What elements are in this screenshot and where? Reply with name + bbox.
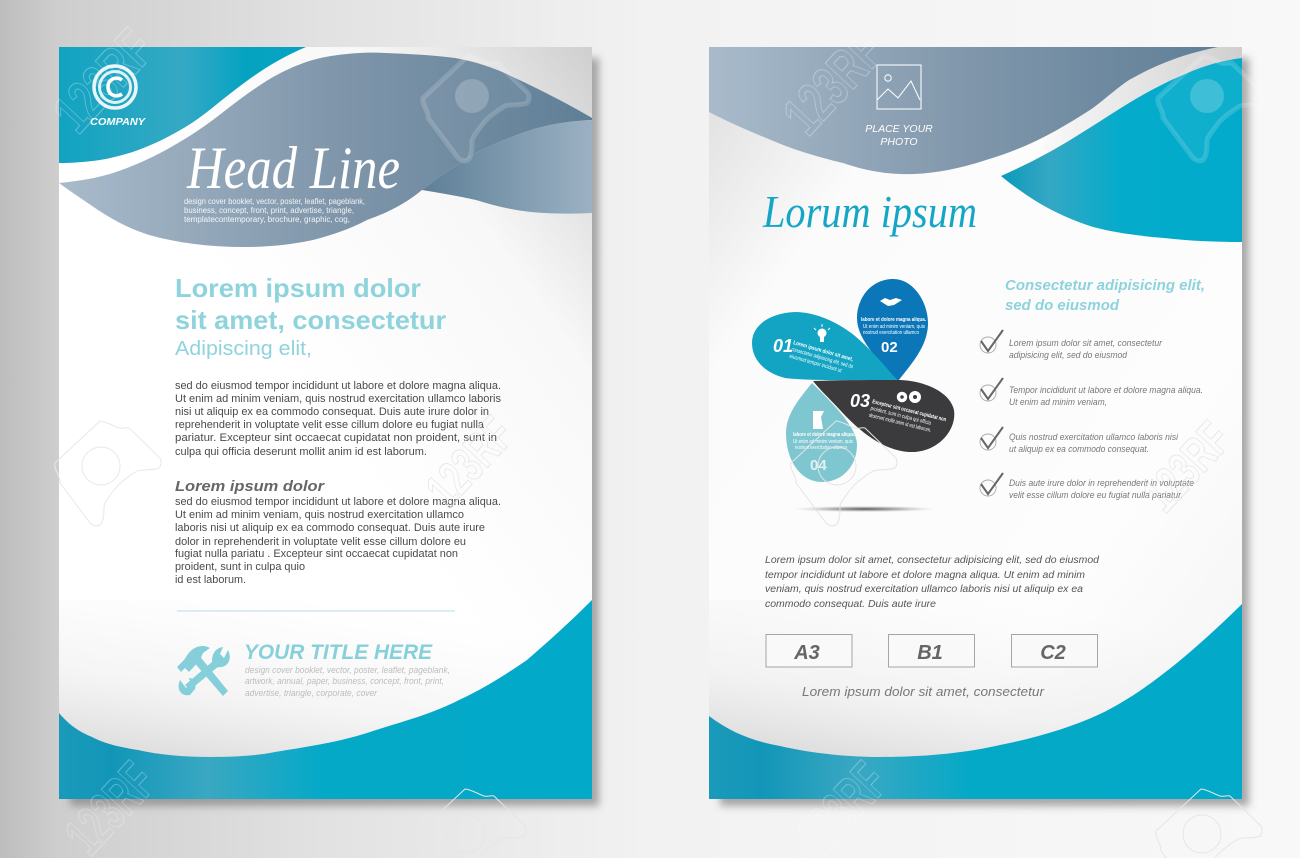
right page paragraph: veniam, quis nostrud exercitation ullamco laboris nisi ut aliquip ex ea [765, 584, 1083, 595]
headline caption: design cover booklet, vector, poster, leaflet, pageblank, [184, 197, 365, 206]
box C2: C2 [1040, 642, 1066, 664]
watermark stamp: top right [1158, 56, 1264, 161]
petal 04 [786, 383, 857, 482]
paragraph one [175, 380, 501, 458]
paragraph two: sed do eiusmod tempor incididunt ut labore et dolore magna aliqua. [175, 496, 501, 508]
petal 01: 01 [773, 336, 793, 356]
teal corner wave [59, 47, 306, 163]
gray lower wave [422, 120, 592, 214]
subheading: Lorem ipsum dolor [175, 478, 325, 495]
list item 4: velit esse cillum dolore eu fugiat nulla pariatur. [1009, 490, 1183, 500]
right page paragraph: Lorem ipsum dolor sit amet, consectetur adipisicing elit, sed do eiusmod [765, 555, 1099, 566]
paragraph one: Ut enim ad minim veniam, quis nostrud exercitation ullamco laboris [175, 393, 501, 405]
paragraph two: id est laborum. [175, 574, 246, 586]
petal 04: labore et dolore magna aliqua. [793, 432, 855, 438]
main heading [175, 273, 446, 360]
icon: photo placeholder [877, 65, 921, 109]
list item 4 [980, 473, 1194, 500]
watermark stamp: bottom centre [420, 789, 526, 858]
petal 03 [813, 380, 954, 452]
box caption: Lorem ipsum dolor sit amet, consectetur [802, 684, 1045, 699]
list item 1: Lorem ipsum dolor sit amet, consectetur [1009, 338, 1163, 348]
headline caption [184, 197, 365, 224]
title caption: artwork, annual, paper, business, concept, front, print, [245, 676, 444, 686]
paragraph two: Ut enim ad minim veniam, quis nostrud exercitation ullamco [175, 509, 464, 521]
box B1 [888, 634, 974, 667]
main heading: sit amet, consectetur [175, 305, 446, 335]
petal floor shadow [793, 506, 937, 512]
list item 2: Ut enim ad minim veniam, [1009, 397, 1107, 407]
list item 1 [980, 330, 1163, 360]
list item 2 [980, 378, 1203, 407]
paragraph one: sed do eiusmod tempor incididunt ut labore et dolore magna aliqua. [175, 380, 501, 392]
petal 02: labore et dolore magna aliqua. [861, 317, 926, 323]
box A3: A3 [793, 642, 820, 664]
paragraph two: proident, sunt in culpa quio [175, 561, 305, 573]
petal 01: Lorem ipsum dolor sit amet, [792, 340, 854, 363]
petal 03: proident, sunt in culpa qui officia [870, 406, 932, 427]
paragraph one: nisi ut aliquip ex ea commodo consequat. Duis aute irure dolor in [175, 406, 489, 418]
petal 01 [752, 312, 897, 380]
photo label: PLACE YOUR [865, 123, 933, 135]
paragraph two: laboris nisi ut aliquip ex ea commodo consequat. Duis aute irure [175, 522, 485, 534]
panel: left page [59, 47, 592, 799]
photo label [865, 123, 933, 148]
watermark stamp: left [55, 421, 161, 526]
size boxes [766, 634, 1098, 667]
main heading: Adipiscing elit, [175, 338, 312, 360]
headline: Head Line [186, 135, 400, 201]
title caption [245, 665, 450, 698]
paragraph two: fugiat nulla pariatu . Excepteur sint occaecat cupidatat non [175, 548, 458, 560]
page shadows [70, 58, 1249, 806]
bottom teal wave [59, 600, 592, 799]
side heading [1005, 278, 1205, 314]
petal 04: Ut enim ad minim veniam, quis [793, 439, 853, 445]
script heading: Lorum ipsum [762, 186, 977, 237]
box A3 [766, 634, 852, 667]
title caption: design cover booklet, vector, poster, leaflet, pageblank, [245, 665, 450, 675]
side heading: Consectetur adipisicing elit, [1005, 278, 1205, 294]
petal 01: eiusmod tempor incidunt ut [789, 354, 842, 374]
petal 03: deserunt mollit anim id est laborum. [868, 413, 932, 434]
paragraph two [175, 496, 501, 586]
watermark text: mid left: 123RF [415, 406, 524, 518]
paragraph one: reprehenderit in voluptate velit esse cillum dolore eu fugiat nulla [175, 419, 485, 431]
petal 04: nostrud exercitation ullamco [795, 445, 847, 451]
list item 4: Duis aute irure dolor in reprehenderit in voluptate [1009, 478, 1194, 488]
right page paragraph: commodo consequat. Duis aute irure [765, 599, 936, 610]
list item 3: Quis nostrud exercitation ullamco laboris nisi [1009, 432, 1179, 442]
right page paragraph [765, 555, 1099, 610]
petal 02: Ut enim ad minim veniam, quis [863, 324, 925, 330]
watermark stamp: bottom right [1156, 789, 1262, 858]
petal 02: 02 [881, 339, 898, 356]
list item 2: Tempor incididunt ut labore et dolore magna aliqua. [1009, 385, 1203, 395]
title block: YOUR TITLE HERE [244, 641, 433, 664]
chart: petal diagram [752, 279, 954, 482]
top right gray corner [1040, 47, 1242, 150]
petal 02: nostrud exercitation ullamco [863, 330, 919, 336]
company name: COMPANY [90, 116, 146, 128]
watermark stamp: top centre [423, 56, 529, 161]
headline caption: business, concept, front, print, advertise, triangle, [184, 206, 354, 215]
right page paragraph: tempor incididunt ut labore et dolore magna aliqua. Ut enim ad minim [765, 570, 1085, 581]
main heading: Lorem ipsum dolor [175, 273, 421, 303]
title caption: advertise, triangle, corporate, cover [245, 688, 378, 698]
petal 03: Excepteur sint occaecat cupidatat non [872, 399, 947, 423]
petal 03: 03 [850, 391, 870, 411]
list item 3: ut aliquip ex ea commodo consequat. [1009, 444, 1149, 454]
list item 1: adipisicing elit, sed do eiusmod [1009, 350, 1128, 360]
side heading: sed do eiusmod [1005, 298, 1120, 314]
petal 04: 04 [810, 457, 827, 474]
watermark text: mid right: 123RF [1132, 411, 1241, 523]
bottom teal wave [709, 604, 1242, 799]
logo [94, 66, 136, 108]
list item 3 [980, 427, 1179, 454]
petal 02 [857, 279, 928, 381]
teal wave [1001, 58, 1242, 242]
paragraph one: pariatur. Excepteur sint occaecat cupidatat non proident, sunt in [175, 432, 497, 444]
box C2 [1012, 634, 1098, 667]
panel: right page [709, 47, 1242, 799]
check list [980, 330, 1203, 500]
petal 01: consectetur adipisicing elit, sed do [791, 347, 854, 370]
watermark stamp: centre [791, 421, 897, 526]
gray photo wave [709, 47, 1218, 174]
icon: hammer and wrench [177, 646, 230, 696]
paragraph two: dolor in reprehenderit in voluptate velit esse cillum dolore eu [175, 536, 466, 548]
headline caption: templatecontemporary, brochure, graphic, cog, [184, 215, 350, 224]
box B1: B1 [917, 642, 943, 664]
gray headline wave [59, 53, 592, 247]
photo label: PHOTO [880, 136, 918, 148]
paragraph one: culpa qui officia deserunt mollit anim id est laborum. [175, 446, 427, 458]
